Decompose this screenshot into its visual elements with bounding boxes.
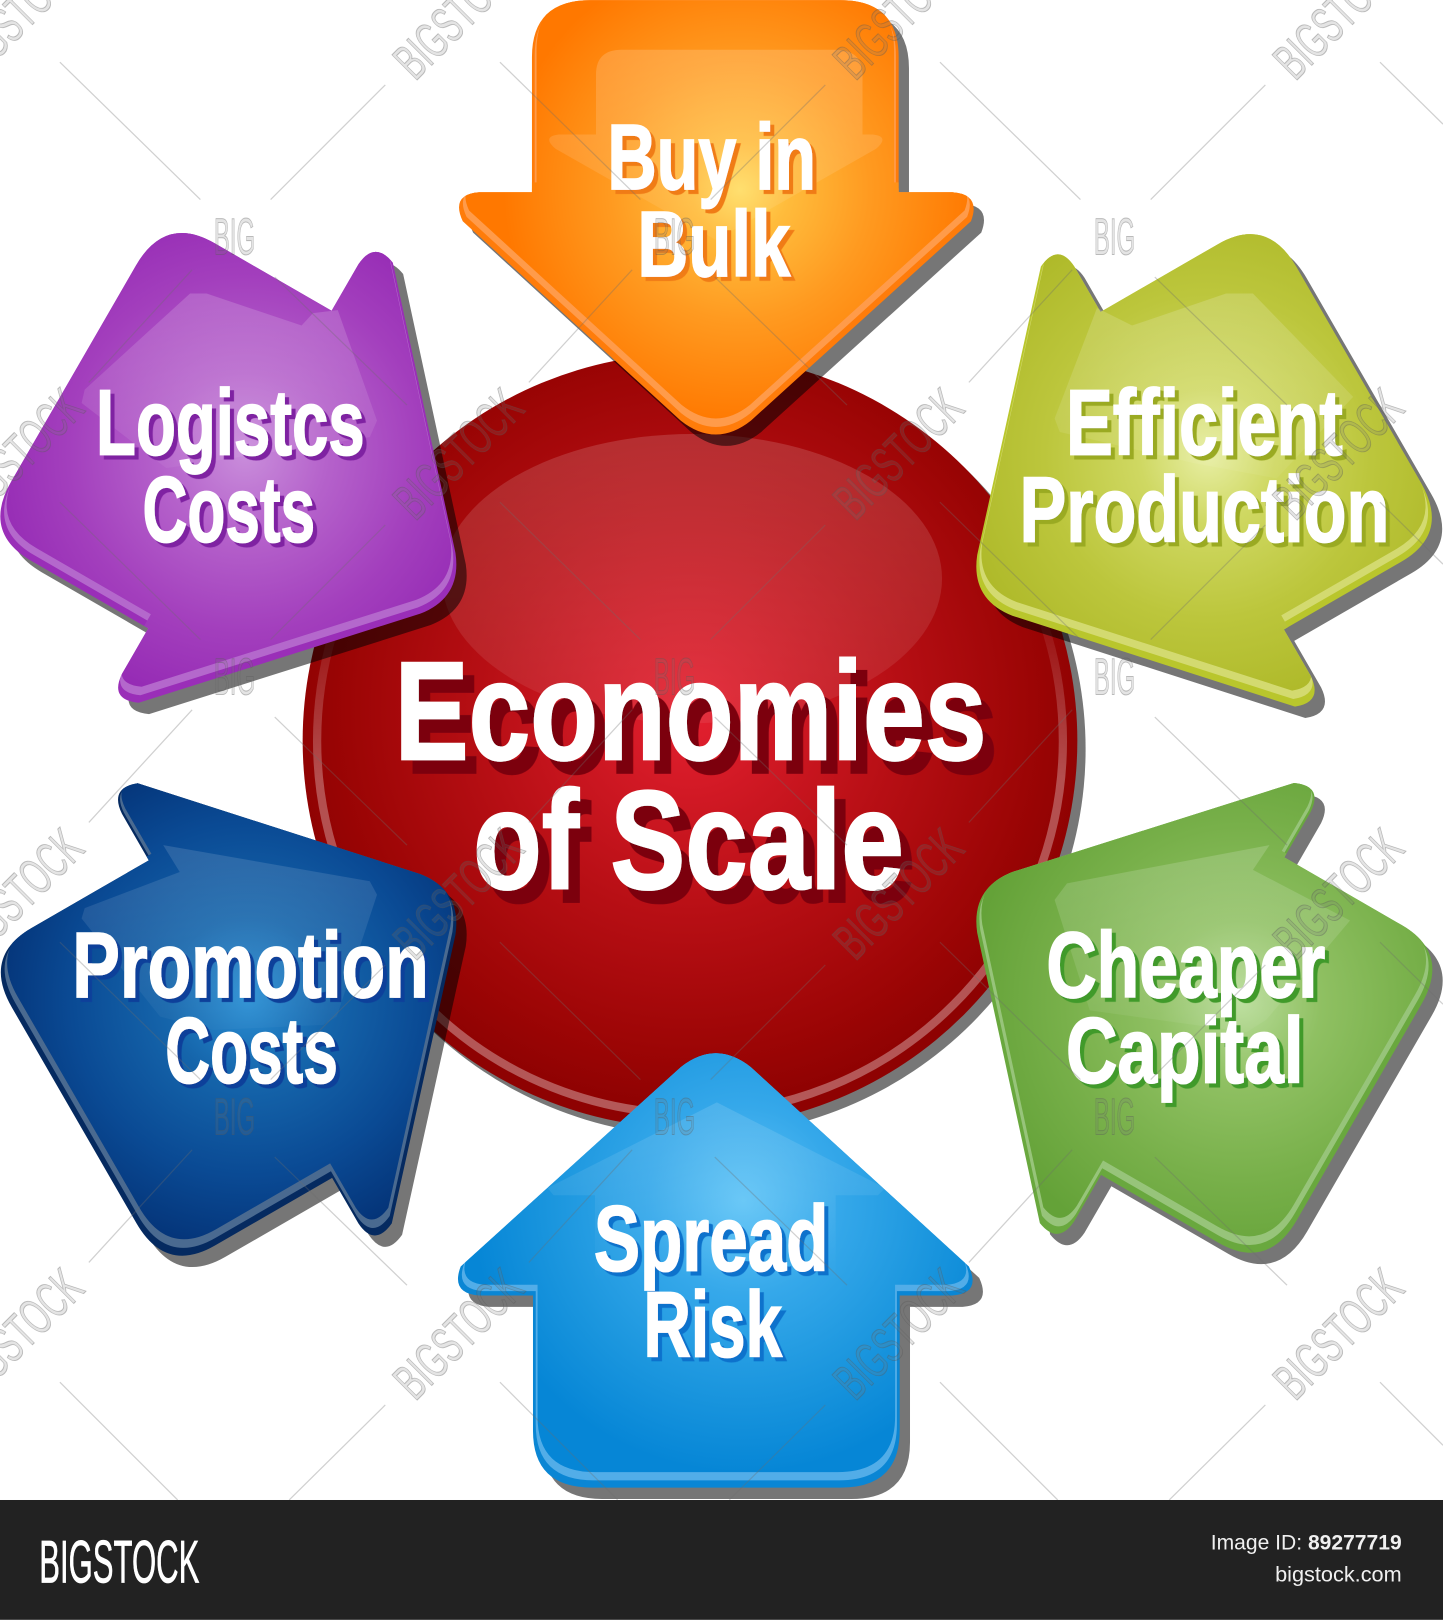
watermark: BIG marks: BIG — [214, 1087, 255, 1145]
arrow: Logistcs Costs: Costs — [143, 457, 315, 561]
footer bar: BIGSTOCK — [39, 1529, 199, 1596]
arrow: Promotion Costs: Promotion — [72, 913, 429, 1017]
arrow: Promotion Costs: Costs — [165, 999, 338, 1103]
watermark: BIG marks: BIG — [654, 1087, 695, 1145]
heading: Economies of Scale — [395, 632, 986, 919]
watermark: diagonal BIGSTOCK marks: BIGSTOCK — [382, 378, 534, 530]
watermark: BIG marks: BIG — [214, 207, 255, 265]
text: BIG — [1094, 1087, 1135, 1145]
footer bar: bigstock.com — [1275, 1562, 1402, 1587]
watermark: BIG marks — [214, 207, 1135, 1145]
heading: Economies of Scale: of Scale — [473, 762, 904, 919]
arrow: Cheaper Capital: Capital — [1066, 999, 1304, 1103]
arrow: Efficient Production: Efficient — [1066, 371, 1343, 475]
heading: Economies of Scale: Economies — [395, 632, 986, 789]
watermark: BIG marks: BIG — [654, 647, 695, 705]
arrow: Efficient Production — [976, 234, 1442, 718]
watermark: diagonal BIGSTOCK marks: BIGSTOCK — [822, 1258, 974, 1410]
arrow: Buy in Bulk: Buy in — [607, 105, 816, 209]
text: BIG — [1094, 207, 1135, 265]
arrow: Logistcs Costs — [0, 233, 467, 714]
arrow: Spread Risk: Risk — [644, 1272, 782, 1376]
arrow: Buy in Bulk: Bulk — [637, 192, 790, 296]
arrow: Cheaper Capital — [976, 783, 1443, 1264]
arrow: Logistcs Costs: Logistcs — [96, 371, 365, 475]
arrow: Spread Risk — [458, 1049, 983, 1499]
watermark: diagonal BIGSTOCK marks: BIGSTOCK — [822, 818, 974, 970]
arrow: Spread Risk: Spread — [594, 1187, 828, 1291]
watermark: diagonal BIGSTOCK marks: BIGSTOCK — [382, 818, 534, 970]
watermark: BIG marks: BIG — [214, 647, 255, 705]
footer bar: Image ID: 89277719 — [1211, 1532, 1402, 1555]
arrow: Promotion Costs — [0, 783, 467, 1267]
text: BIG — [1094, 647, 1135, 705]
watermark: diagonal BIGSTOCK marks: BIGSTOCK — [822, 378, 974, 530]
footer bar — [0, 1500, 1443, 1620]
watermark: diagonal BIGSTOCK marks: BIGSTOCK — [382, 1258, 534, 1410]
watermark: BIG marks: BIG — [654, 207, 695, 265]
arrow: Buy in Bulk — [459, 0, 984, 446]
arrow: Cheaper Capital: Cheaper — [1046, 913, 1325, 1017]
panel: central circle — [303, 353, 1086, 1136]
